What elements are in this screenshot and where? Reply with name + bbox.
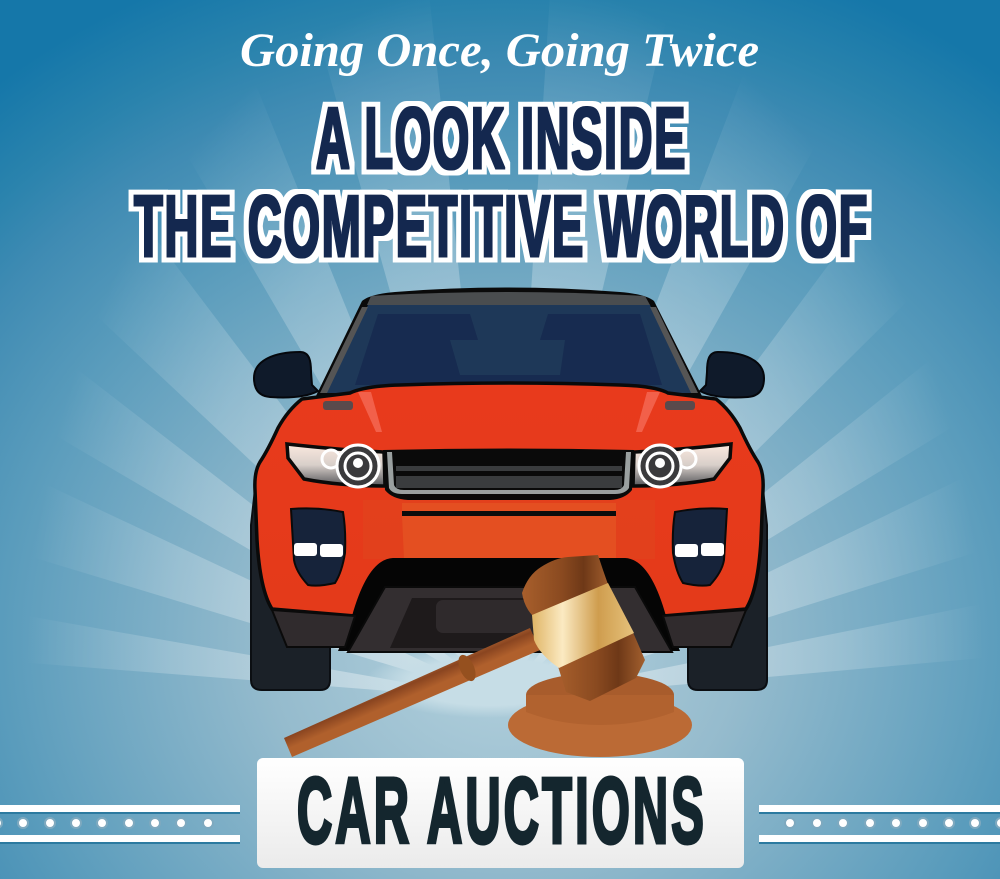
title [134,89,869,276]
tires [251,480,767,690]
gavel handle [284,628,540,757]
tagline: Going Once, Going Twice [240,24,759,77]
hood creases [358,392,382,432]
glow under car [365,646,615,718]
title line 1: A LOOK INSIDE [316,89,687,188]
grille [383,448,634,500]
right stripe decoration [759,805,1000,844]
bottom banner [257,758,744,868]
lower bumper [338,558,680,651]
car [251,288,767,690]
gavel head [522,555,610,622]
body [255,383,763,616]
sunburst rays [0,0,1000,700]
gavel base [508,673,692,757]
windshield [325,305,693,393]
left stripe decoration [0,805,240,844]
side mirrors [254,352,764,397]
gavel gold band [532,583,634,668]
roof and cabin [314,288,704,400]
hood vents [323,401,353,410]
fog lamps [291,508,727,586]
bumper panel [363,500,655,559]
headlights [287,444,731,486]
roof band [367,292,650,305]
gavel [284,555,692,757]
